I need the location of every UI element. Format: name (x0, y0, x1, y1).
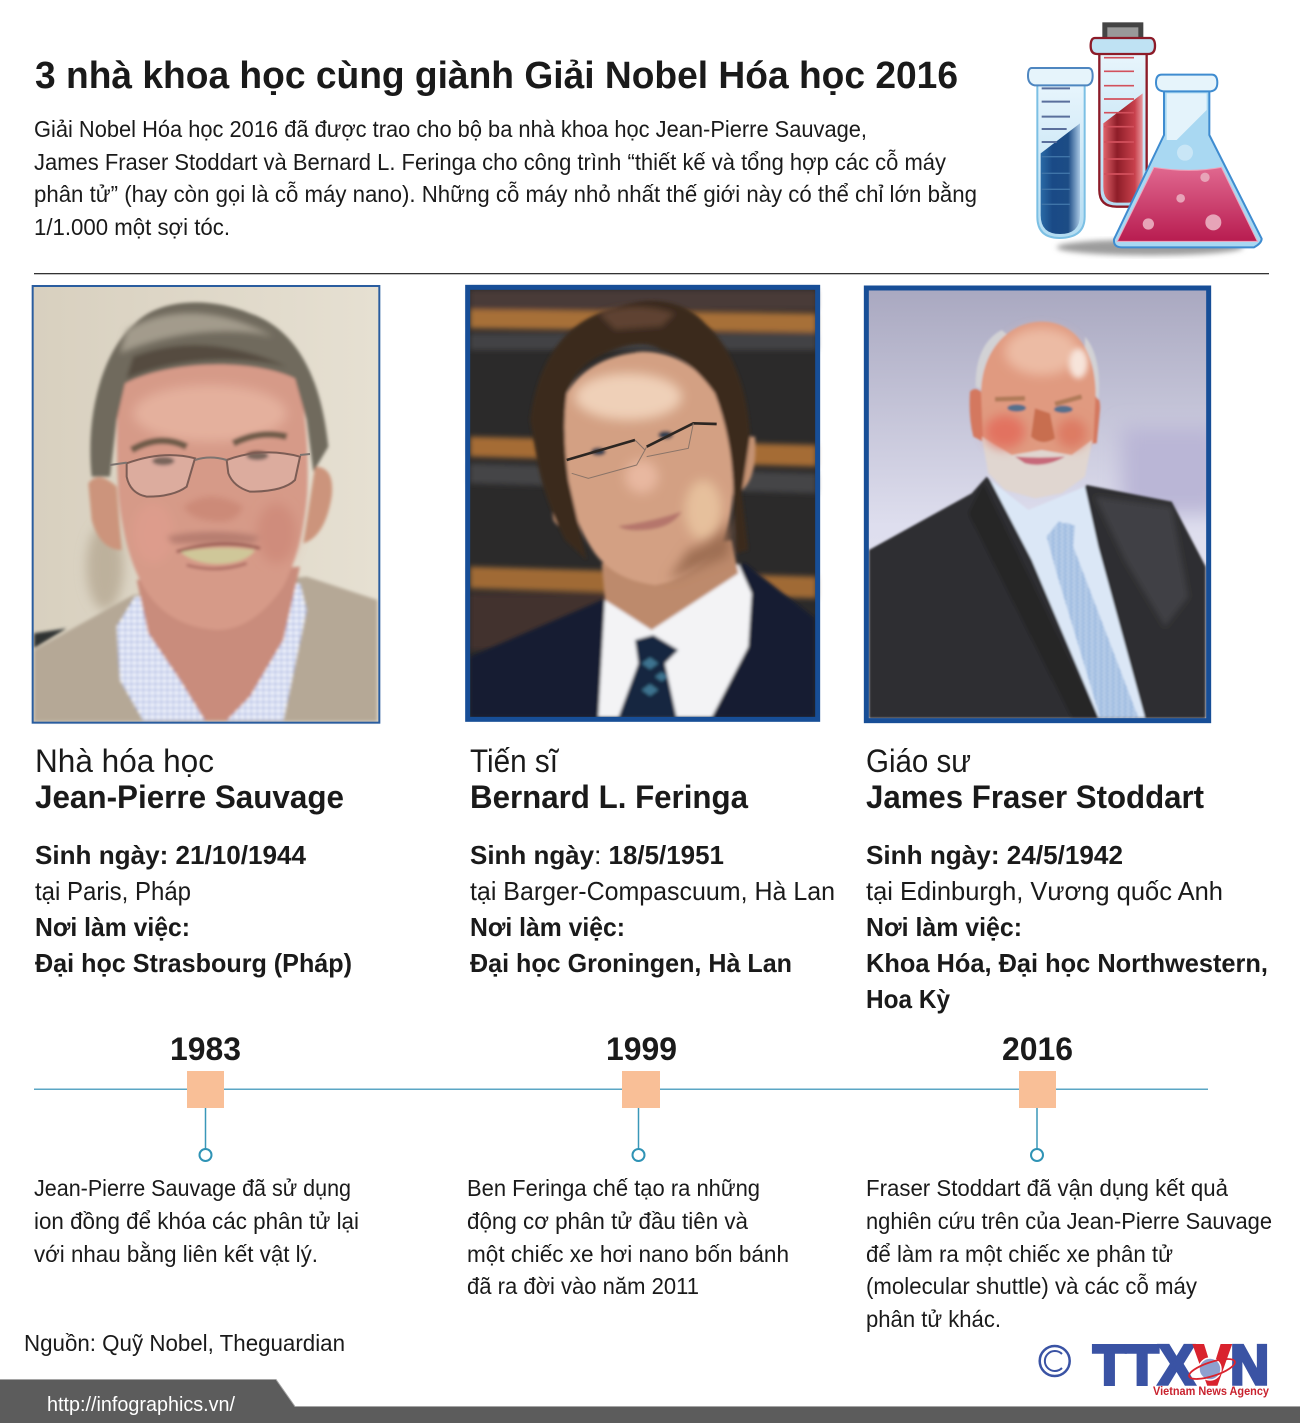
name: Bernard L. Feringa: Tiến sĩ (470, 743, 560, 779)
text: 1999 achievement: một chiếc xe hơi nano bốn bánh (467, 1241, 789, 1267)
logo: TTXVN Vietnam News Agency: Vietnam News Agency (1153, 1386, 1270, 1398)
text: 1983 achievement: Jean-Pierre Sauvage đã sử dụng (34, 1175, 351, 1201)
details: James Fraser Stoddart: Nơi làm việc: (866, 912, 1022, 942)
intro text block (34, 116, 977, 240)
text: 1983 achievement (34, 1175, 359, 1267)
details: Jean-Pierre Sauvage (35, 840, 352, 978)
photo: James Fraser Stoddart (866, 288, 1222, 721)
details: Jean-Pierre Sauvage: Sinh ngày: 21/10/1944 (35, 840, 307, 870)
panel: Jean-Pierre Sauvage (33, 286, 379, 978)
details: James Fraser Stoddart (866, 840, 1268, 1014)
text: 2016 achievement: phân tử khác. (866, 1306, 1001, 1332)
text: 2016 achievement: Fraser Stoddart đã vận dụng kết quả (866, 1175, 1228, 1201)
footer band (0, 1379, 1300, 1423)
name: Jean-Pierre Sauvage: Nhà hóa học (35, 743, 214, 779)
timeline year 1983: 1983 (170, 1031, 241, 1067)
details: Bernard L. Feringa: Nơi làm việc: (470, 912, 625, 942)
name: Jean-Pierre Sauvage (35, 743, 344, 815)
photo: Jean-Pierre Sauvage (33, 286, 379, 723)
intro text block: Giải Nobel Hóa học 2016 đã được trao cho bộ ba nhà khoa học Jean-Pierre Sauvage, (34, 116, 867, 142)
text: 1999 achievement: Ben Feringa chế tạo ra những (467, 1175, 760, 1201)
details: James Fraser Stoddart: Khoa Hóa, Đại học Northwestern, (866, 948, 1268, 978)
text: 2016 achievement: (molecular shuttle) và các cỗ máy (866, 1273, 1197, 1299)
name: James Fraser Stoddart: Giáo sư (866, 743, 971, 779)
details: Bernard L. Feringa (470, 840, 835, 978)
icon: laboratory test tubes and flask (1028, 22, 1262, 255)
details: Bernard L. Feringa: Đại học Groningen, Hà Lan (470, 948, 792, 978)
blue test tube (1028, 68, 1093, 238)
copyright symbol (1040, 1346, 1070, 1376)
text: 2016 achievement: nghiên cứu trên của Jean-Pierre Sauvage (866, 1208, 1272, 1234)
text: 2016 achievement: để làm ra một chiếc xe phân tử (866, 1241, 1173, 1267)
name: Bernard L. Feringa: Bernard L. Feringa (470, 779, 748, 815)
text: 2016 achievement (866, 1175, 1272, 1332)
text: 1983 achievement: ion đồng để khóa các phân tử lại (34, 1208, 359, 1234)
logo globe (1187, 1355, 1237, 1383)
timeline year 2016: 2016 (1002, 1031, 1073, 1067)
source note: Nguồn: Quỹ Nobel, Theguardian (24, 1330, 345, 1356)
details: James Fraser Stoddart: Hoa Kỳ (866, 984, 951, 1014)
intro text block: phân tử” (hay còn gọi là cỗ máy nano). Những cỗ máy nhỏ nhất thế giới này có thể chỉ lớn bằng (34, 181, 977, 207)
red test tube (1091, 38, 1155, 207)
conical flask (1114, 75, 1262, 247)
timeline year 2016 (1002, 1031, 1073, 1161)
details: Jean-Pierre Sauvage: tại Paris, Pháp (35, 876, 191, 906)
name: James Fraser Stoddart (866, 743, 1204, 815)
text: 1999 achievement: động cơ phân tử đầu tiên và (467, 1208, 748, 1234)
timeline (34, 1031, 1208, 1161)
text: 1999 achievement: đã ra đời vào năm 2011 (467, 1273, 699, 1299)
panel: Bernard L. Feringa (468, 287, 835, 978)
intro text block: James Fraser Stoddart và Bernard L. Feringa cho công trình “thiết kế và tổng hợp các cỗ máy (34, 149, 946, 175)
details: Jean-Pierre Sauvage: Đại học Strasbourg (Pháp) (35, 948, 352, 978)
timeline year 1999 (606, 1031, 677, 1161)
details: Bernard L. Feringa: Sinh ngày: 18/5/1951 (470, 840, 724, 870)
timeline year 1999: 1999 (606, 1031, 677, 1067)
logo: TTXVN Vietnam News Agency: TTXVN (1093, 1333, 1269, 1396)
name: James Fraser Stoddart: James Fraser Stoddart (866, 779, 1204, 815)
details: Jean-Pierre Sauvage: Nơi làm việc: (35, 912, 190, 942)
details: Bernard L. Feringa: tại Barger-Compascuum, Hà Lan (470, 876, 835, 906)
name: Bernard L. Feringa (470, 743, 748, 815)
timeline year 1983 (170, 1031, 241, 1161)
name: Jean-Pierre Sauvage: Jean-Pierre Sauvage (35, 779, 344, 815)
footer band: http://infographics.vn/ (47, 1394, 235, 1416)
title: 3 nhà khoa học cùng giành Giải Nobel Hóa học 2016 (35, 55, 958, 97)
text: 1999 achievement (467, 1175, 789, 1299)
details: James Fraser Stoddart: Sinh ngày: 24/5/1942 (866, 840, 1123, 870)
details: James Fraser Stoddart: tại Edinburgh, Vương quốc Anh (866, 876, 1223, 906)
panel: James Fraser Stoddart (866, 288, 1268, 1014)
text: 1983 achievement: với nhau bằng liên kết vật lý. (34, 1241, 318, 1267)
intro text block: 1/1.000 một sợi tóc. (34, 214, 230, 240)
photo: Bernard L. Feringa (468, 287, 818, 719)
